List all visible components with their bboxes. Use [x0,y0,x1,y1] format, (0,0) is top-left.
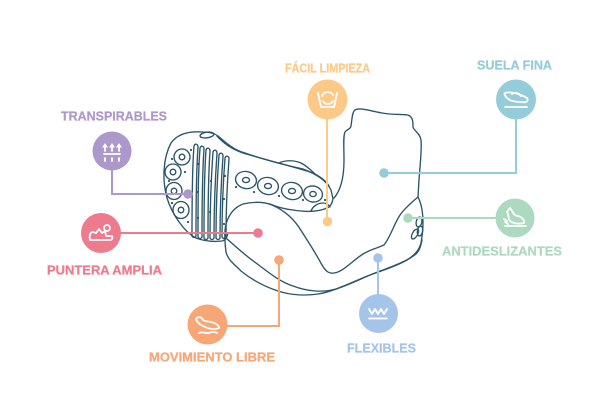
shoe sole view [164,131,333,241]
icon: thin sole shoe [505,92,528,107]
icon: breathable arrows [102,143,122,161]
callout: suela fina [379,58,553,178]
sole dots [168,149,326,225]
icon: moving shoe [196,317,219,333]
shoe inner sole line [226,238,422,291]
callout: flexibles [347,253,416,356]
icon: wash basin [318,92,337,107]
label: TRANSPIRABLES [61,108,167,124]
sole tread circles [165,149,324,218]
label: FÁCIL LIMPIEZA [285,60,371,76]
callout: transpirables [61,108,193,199]
sole ribs [192,144,229,240]
callout: puntera amplia [47,213,263,278]
callout: antideslizantes [403,198,562,258]
icon: wide toe shoe [90,225,112,240]
icon: non-slip foot [504,208,526,226]
label: FLEXIBLES [347,340,416,356]
heel lug ovals [410,217,423,240]
callout: fácil limpieza [285,60,371,226]
icon: flexible wave [369,309,387,318]
label: MOVIMIENTO LIBRE [149,350,275,364]
label: PUNTERA AMPLIA [47,262,163,278]
shoe illustration [164,109,423,295]
label: SUELA FINA [477,58,553,72]
callout: movimiento libre [149,255,284,364]
label: ANTIDESLIZANTES [442,244,562,258]
shoe upper and collar [225,109,423,295]
